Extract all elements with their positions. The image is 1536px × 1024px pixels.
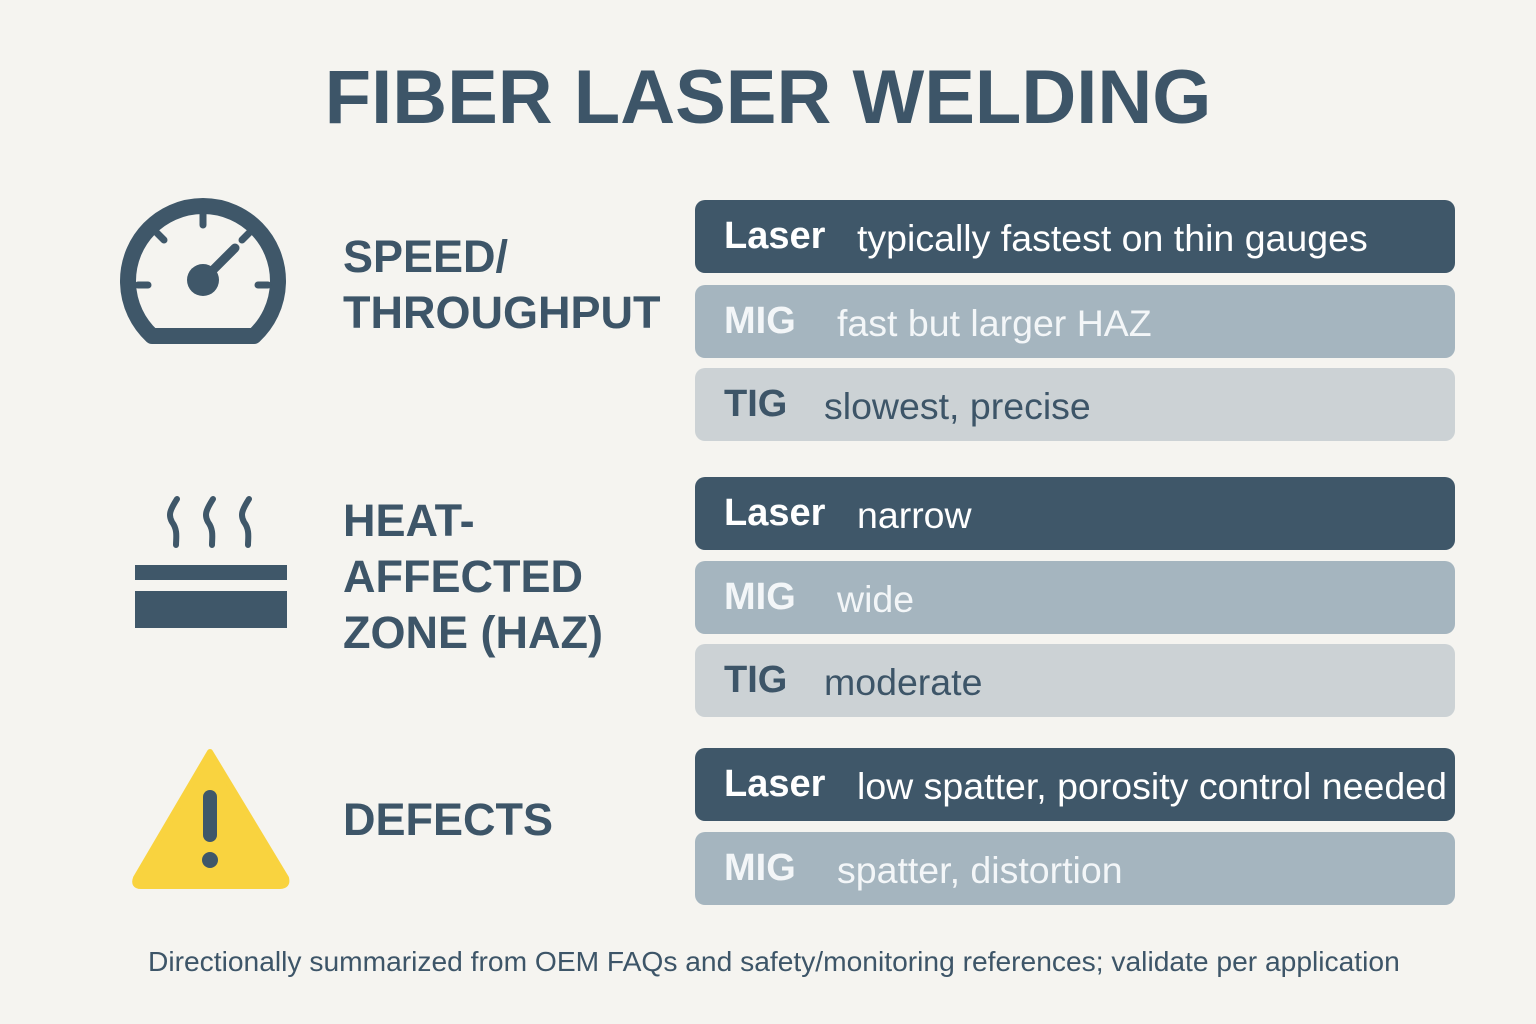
bar: laser defects xyxy=(695,748,1455,821)
bar: tig haz xyxy=(695,644,1455,717)
bar: mig speed: fast but larger HAZ xyxy=(837,302,1152,344)
bar: mig haz: wide xyxy=(837,578,914,620)
label: haz: AFFECTED xyxy=(343,551,583,602)
bars: haz xyxy=(695,477,1455,717)
label: speed: THROUGHPUT xyxy=(343,287,660,338)
icon: speedometer xyxy=(120,198,286,344)
bar: laser haz: Laser xyxy=(724,492,825,534)
bar: laser haz: narrow xyxy=(857,494,972,536)
bar: laser haz xyxy=(695,477,1455,550)
icon: warning xyxy=(132,749,290,889)
bar: tig haz: moderate xyxy=(824,661,982,703)
bar: laser defects: low spatter, porosity control needed xyxy=(857,765,1447,807)
bar: tig haz: TIG xyxy=(724,659,787,701)
bar: laser defects: Laser xyxy=(724,763,825,805)
bar: mig haz xyxy=(695,561,1455,634)
label: speed xyxy=(343,231,660,338)
footer note: Directionally summarized from OEM FAQs and safety/monitoring references; validate per application xyxy=(148,945,1400,977)
bars: speed xyxy=(695,200,1455,441)
label: haz: ZONE (HAZ) xyxy=(343,607,603,658)
bar: laser speed xyxy=(695,200,1455,273)
bar: tig speed: TIG xyxy=(724,383,787,425)
label: defects: DEFECTS xyxy=(343,794,553,845)
bar: mig speed: MIG xyxy=(724,300,796,342)
bar: laser speed: typically fastest on thin gauges xyxy=(857,217,1368,259)
bar: mig haz: MIG xyxy=(724,576,796,618)
bar: mig defects: MIG xyxy=(724,847,796,889)
bar: mig speed xyxy=(695,285,1455,358)
bar: tig speed xyxy=(695,368,1455,441)
bar: mig defects: spatter, distortion xyxy=(837,849,1123,891)
label: haz: HEAT- xyxy=(343,495,475,546)
label: speed: SPEED/ xyxy=(343,231,508,282)
bar: laser speed: Laser xyxy=(724,215,825,257)
bars: defects xyxy=(695,748,1455,905)
icon: heat xyxy=(135,496,287,628)
label: haz xyxy=(343,495,603,658)
bar: tig speed: slowest, precise xyxy=(824,385,1091,427)
bar: mig defects xyxy=(695,832,1455,905)
title: FIBER LASER WELDING xyxy=(325,55,1211,140)
